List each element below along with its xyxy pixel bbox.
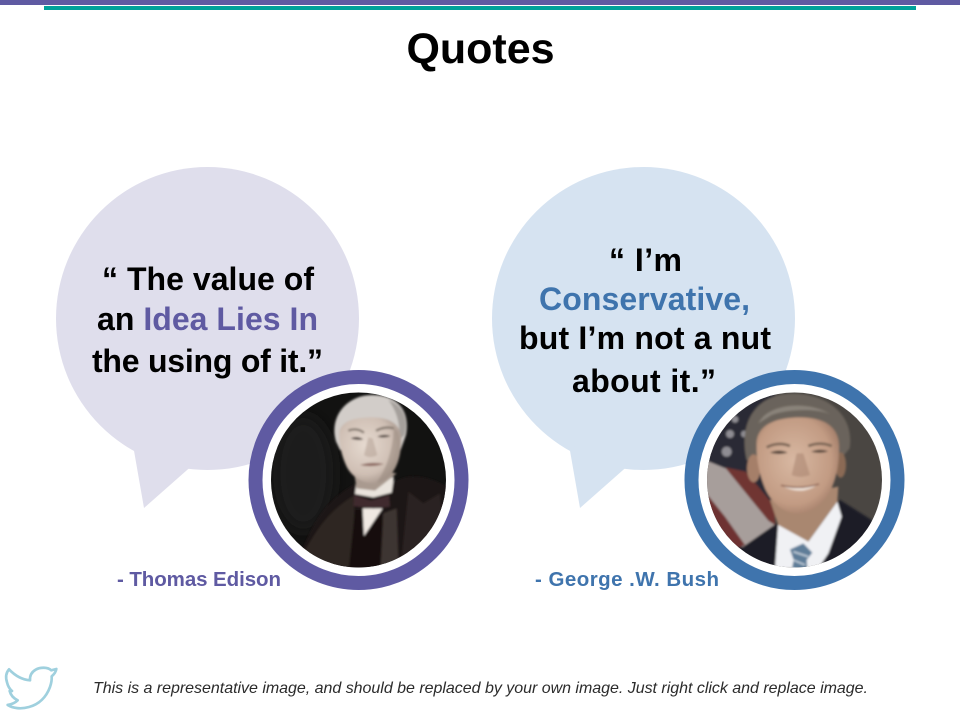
attribution: George W. Bush: - George .W. Bush: [535, 568, 719, 591]
nose shadow: [792, 453, 810, 477]
quote text: Bush: but I’m not a nut: [519, 320, 771, 356]
quote text: Edison: [92, 261, 323, 379]
mouth: [782, 485, 818, 491]
neck: [353, 468, 397, 491]
vest: [348, 510, 382, 568]
speech bubble: Edison: [56, 167, 359, 508]
shirt: [775, 502, 842, 568]
suit: [738, 500, 888, 573]
jacket: [302, 478, 446, 567]
top purple bar: [0, 0, 960, 5]
quote text: Bush: “ I’m: [609, 242, 682, 278]
nose: [364, 437, 377, 457]
panel: Bush quote: [492, 167, 898, 591]
shadow right of face: [378, 429, 400, 482]
shirt front: [363, 508, 383, 536]
footer note: This is a representative image, and should be replaced by your own image. Just right click and replace image.: [93, 680, 868, 697]
portrait: George W. Bush: [707, 392, 882, 568]
brows: [767, 444, 832, 447]
eyes: [770, 451, 788, 454]
title: Quotes: [406, 25, 554, 73]
hair: [334, 395, 407, 450]
panel: Edison quote: [56, 167, 462, 591]
ear: [747, 454, 760, 482]
icon: twitter bird: [6, 668, 56, 708]
quote text: Edison: “ The value of: [102, 261, 314, 297]
bow tie: [353, 495, 390, 509]
quote text: Bush: Conservative,: [539, 281, 750, 317]
quote text: Edison: the using of it.”: [92, 343, 323, 379]
quote text: Bush: about it.”: [572, 363, 716, 399]
speech bubble: Bush: [492, 167, 795, 508]
hair: [745, 394, 850, 463]
collar: [355, 477, 394, 497]
quote text: Edison: an Idea Lies In: [97, 301, 318, 337]
portrait ring: Edison: [256, 377, 462, 583]
face: [339, 417, 401, 483]
attribution: Thomas Edison: - Thomas Edison: [117, 568, 281, 591]
portrait: Thomas Edison: [267, 390, 450, 573]
face: [757, 417, 839, 514]
tie: [790, 543, 812, 573]
mouth: [360, 463, 384, 466]
brows: [348, 428, 394, 433]
quote text: Bush: [519, 242, 771, 399]
portrait ring: Bush: [692, 377, 898, 583]
neck: [770, 487, 838, 542]
top teal bar: [44, 6, 916, 10]
flag: [708, 394, 776, 550]
eyes: [351, 437, 363, 440]
